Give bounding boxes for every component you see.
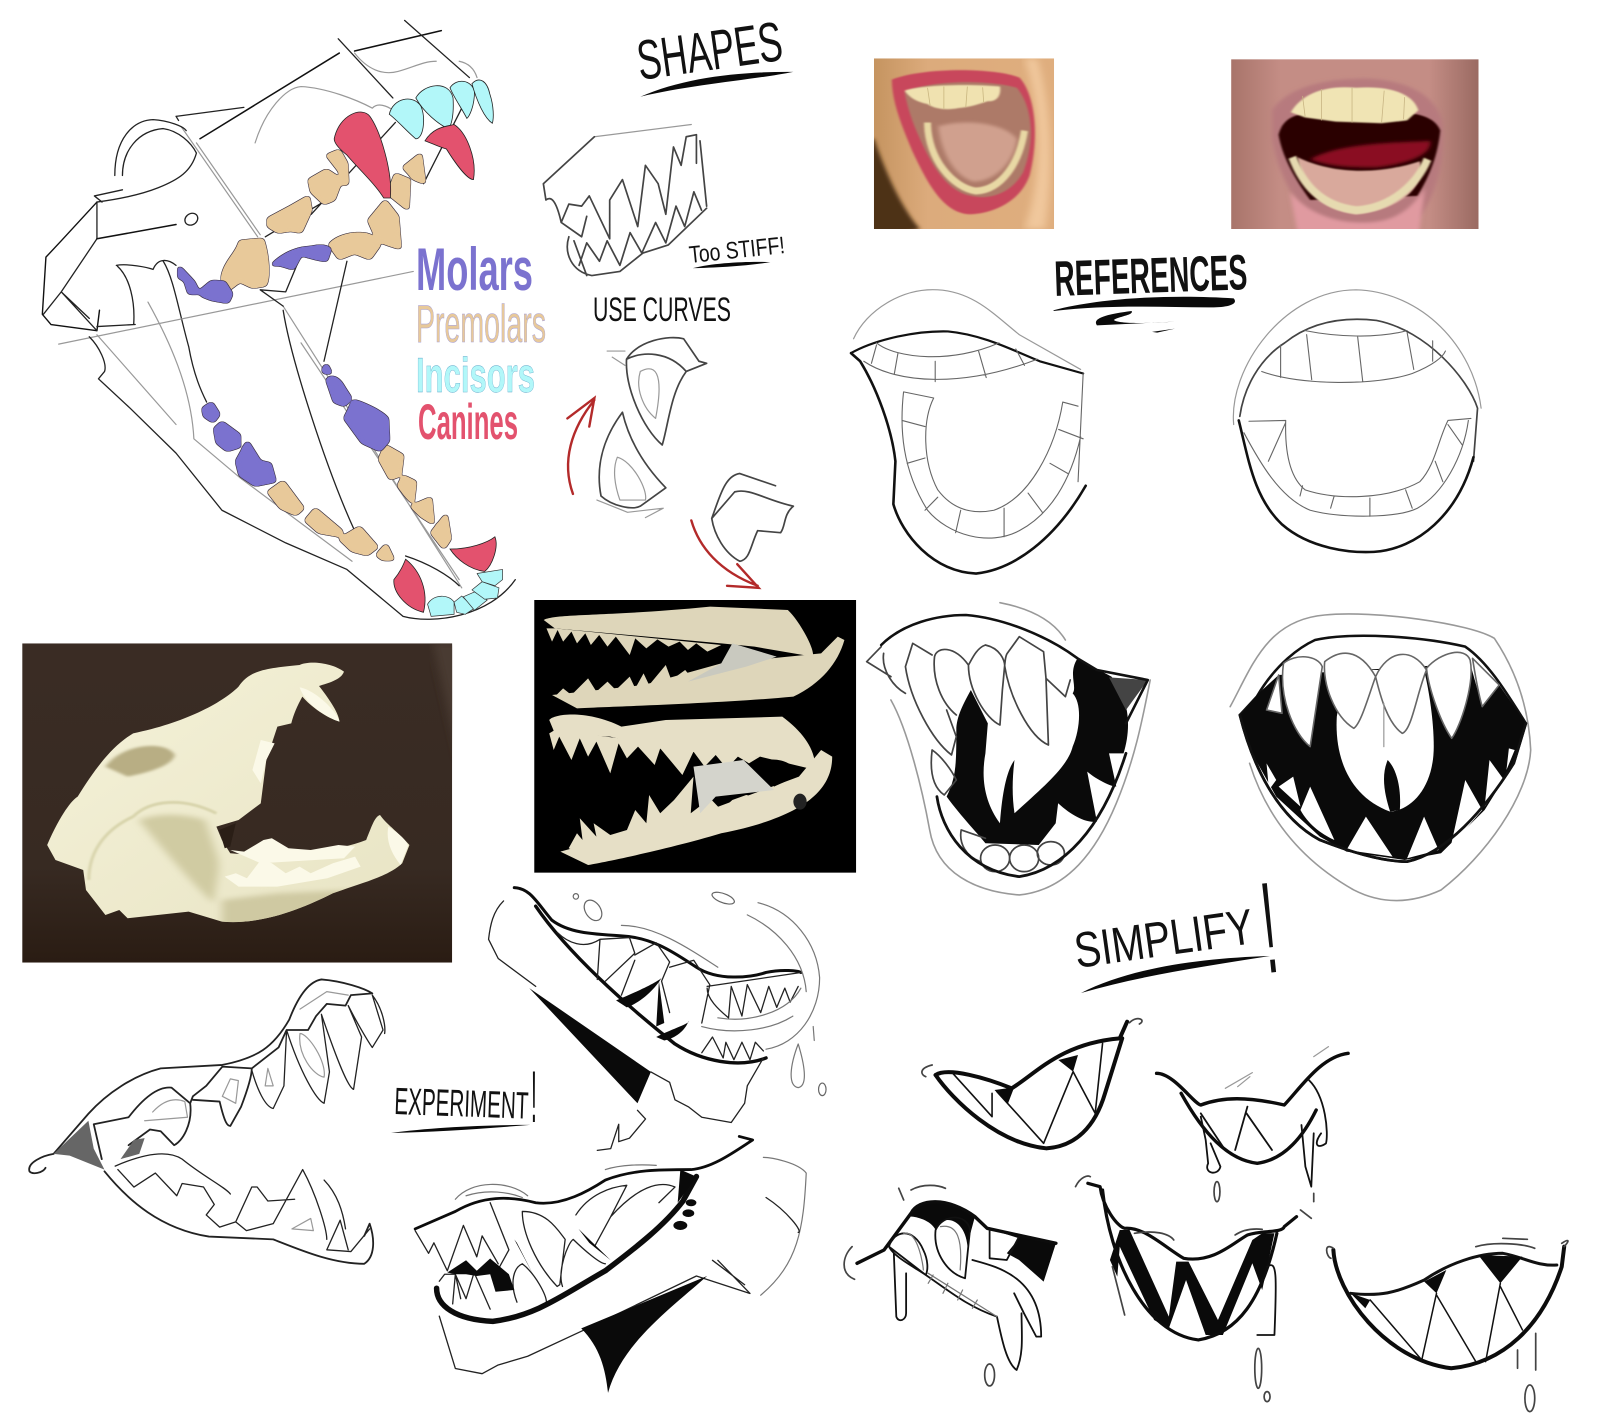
legend item: incisors: Incisors (416, 349, 535, 403)
sketch: curved tooth down (712, 474, 793, 561)
skull line drawing (42, 20, 515, 619)
sketch: fanged mouth side view (867, 603, 1150, 895)
legend item: canines: Canines (418, 394, 518, 450)
simplified mouth 5 (1327, 1238, 1568, 1412)
legend item: premolars: Premolars (416, 295, 546, 354)
heading: simplify: SIMPLIFY (1071, 898, 1257, 979)
legend: tooth types (416, 236, 546, 450)
panel: experiment sketches (29, 888, 826, 1393)
panel: simplified mouths (844, 1019, 1568, 1412)
sketch: wide-open jaw (29, 979, 385, 1264)
experiment exclamation mark: ! (531, 1057, 537, 1138)
sketch: open mouth front view (1233, 290, 1481, 552)
croc skull top (544, 607, 844, 708)
label: too stiff: Too STIFF! (688, 232, 786, 269)
panel: shapes sketches (543, 72, 793, 588)
panel: wolf skull tooth diagram (42, 20, 515, 619)
croc skull bottom (549, 715, 832, 865)
sketch: open mouth side view (851, 290, 1086, 574)
premolars (222, 150, 451, 560)
sketch: curved tooth up (597, 338, 707, 518)
molars (179, 246, 389, 486)
arrow: curve up (567, 398, 594, 494)
photo: wolf skull (22, 643, 460, 963)
sketch: big-toothed grin (415, 1136, 806, 1393)
panel: reference photos and mouth sketches (851, 58, 1481, 574)
photo: open mouth with red lips (874, 58, 1054, 229)
canines (334, 112, 496, 612)
panel: fanged mouths (867, 603, 1531, 901)
upper incisors (389, 80, 493, 139)
too stiff underline (693, 262, 770, 268)
references underline (1054, 297, 1235, 333)
simplify underline (1081, 956, 1270, 993)
sketch: fanged mouth front view (1230, 614, 1531, 901)
legend item: molars: Molars (416, 236, 533, 303)
heading: shapes: SHAPES (633, 9, 786, 92)
simplified mouth 1 (922, 1019, 1142, 1148)
photo: crocodile skulls (534, 600, 856, 873)
sketch: stiff jaw (543, 125, 707, 276)
photo: open mouth close-up (1231, 59, 1479, 245)
experiment underline (391, 1125, 530, 1133)
simplify exclamation mark: ! (1255, 855, 1284, 1001)
heading: references: REFERENCES (1053, 244, 1248, 307)
simplified mouth 2 (1157, 1047, 1348, 1202)
arrow: curve down (691, 520, 759, 588)
heading: experiment: EXPERIMENT (394, 1081, 529, 1128)
label: use curves: USE CURVES (593, 291, 731, 329)
lower incisors (428, 569, 503, 616)
sketch: side grin (489, 888, 826, 1150)
shapes underline (640, 72, 793, 97)
simplified mouth 3 (844, 1185, 1056, 1386)
simplified mouth 4 (1076, 1176, 1311, 1402)
